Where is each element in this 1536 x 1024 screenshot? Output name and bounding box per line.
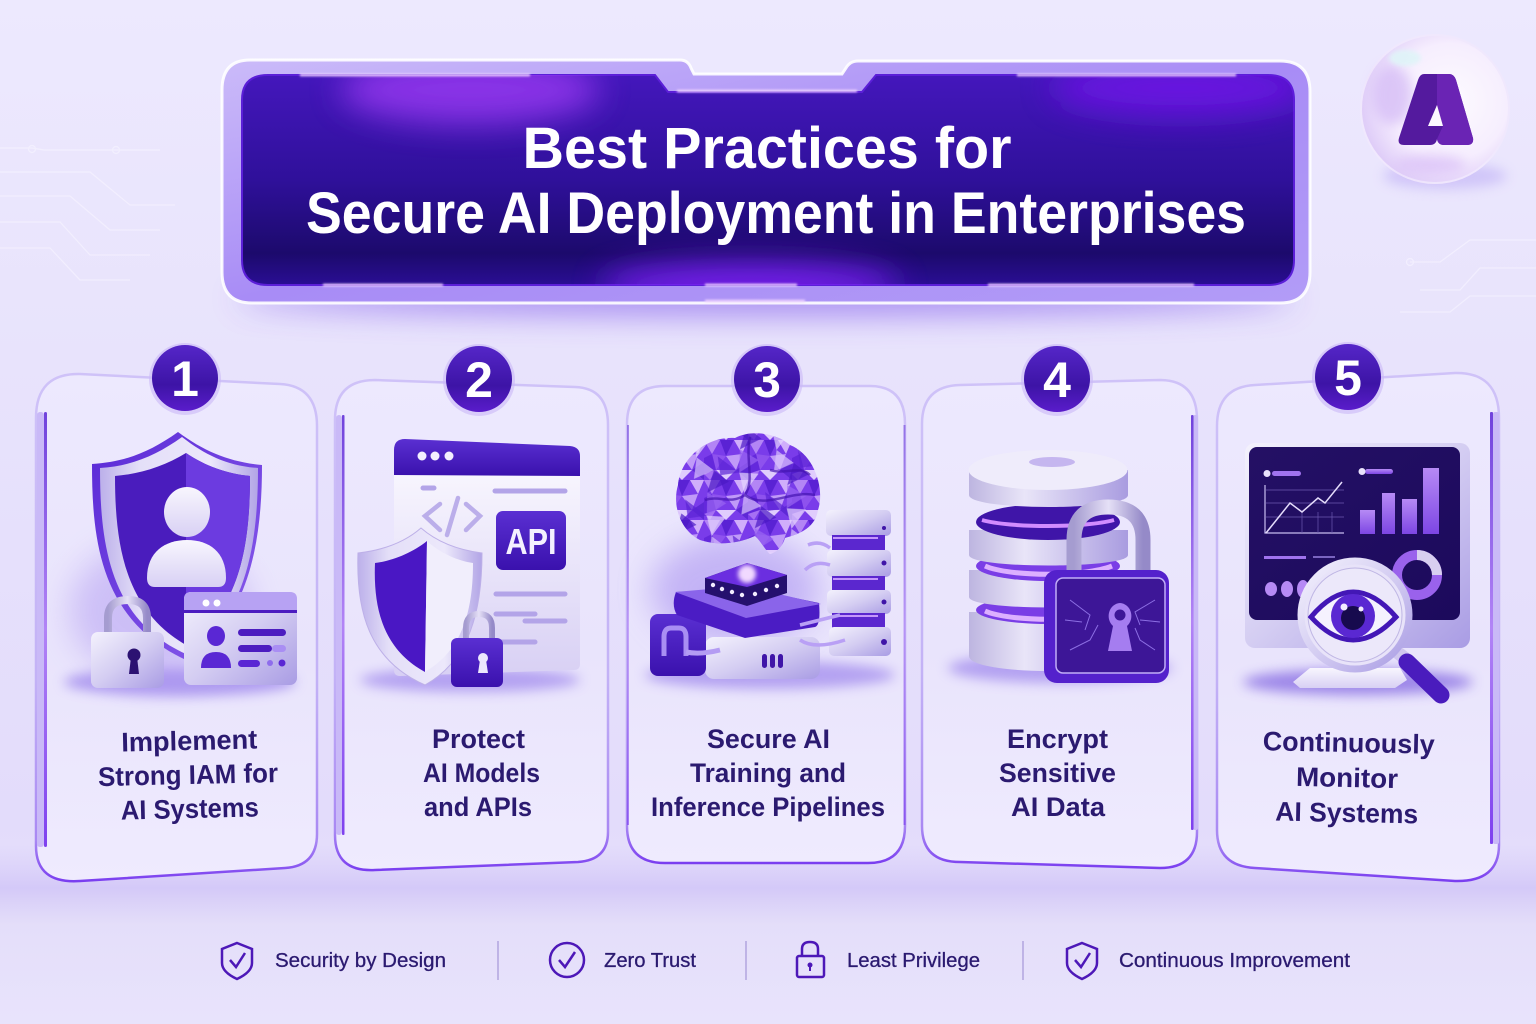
card 1 label <box>97 724 280 826</box>
security by design: Security by Design <box>275 950 446 972</box>
logo bubble <box>1361 35 1509 189</box>
icon: API window with shield and lock <box>358 439 580 692</box>
card 4 label: AI Data <box>1011 792 1106 822</box>
card 1 label: Implement <box>121 724 258 758</box>
zero trust <box>550 943 696 977</box>
number badge 4: 4 <box>1043 352 1071 408</box>
keyhole <box>1108 603 1132 651</box>
panel: card 3 <box>627 344 906 863</box>
light beam <box>745 555 749 580</box>
title banner <box>222 56 1310 314</box>
lower white box <box>705 637 820 679</box>
stat pills <box>1264 556 1335 598</box>
code symbol <box>425 498 480 535</box>
user figure <box>147 487 226 587</box>
card 3 label: Secure AI <box>707 724 830 754</box>
card 4 label: Encrypt <box>1007 724 1108 754</box>
number badge 2 <box>443 344 515 416</box>
panel: card 5 <box>1217 342 1499 881</box>
donut chart <box>1397 555 1437 595</box>
circuit pattern right <box>1400 240 1536 312</box>
number badge 1: 1 <box>171 351 199 407</box>
card 2 label: and APIs <box>424 792 532 822</box>
zero trust: Zero Trust <box>604 950 696 972</box>
number badge 4 <box>1021 344 1093 416</box>
base plate <box>674 586 821 638</box>
card 2 label <box>423 724 540 822</box>
card 1 label: AI Systems <box>120 792 259 826</box>
ID card <box>184 592 297 685</box>
title text <box>306 116 1246 246</box>
security by design <box>222 943 446 979</box>
card 1 label: Strong IAM for <box>98 758 279 792</box>
icon: shield with user, lock and ID card <box>64 432 297 696</box>
panel: card 2 <box>335 344 608 870</box>
least privilege <box>797 942 980 977</box>
card 5 label: Monitor <box>1296 762 1399 794</box>
continuous improvement <box>1067 943 1350 979</box>
API button <box>496 511 566 570</box>
footer principles <box>222 941 1350 980</box>
card 5 label <box>1261 726 1435 830</box>
number badge 2: 2 <box>465 352 493 408</box>
card 3 label <box>651 724 885 822</box>
number badge 1 <box>149 343 221 415</box>
server stack <box>826 510 891 656</box>
card 4 label <box>999 724 1116 822</box>
number badge 5 <box>1312 342 1384 414</box>
bar chart <box>1358 468 1439 534</box>
chip <box>705 563 787 606</box>
card 5 label: Continuously <box>1262 726 1435 760</box>
continuous improvement: Continuous Improvement <box>1119 950 1350 972</box>
floor <box>0 845 1536 1024</box>
panel: card 4 <box>922 344 1198 868</box>
line chart <box>1264 470 1344 533</box>
padlock <box>451 614 503 687</box>
number badge 3 <box>731 344 803 416</box>
title text: Best Practices for <box>522 116 1012 181</box>
icon: encrypted database with padlock <box>948 450 1172 683</box>
padlock <box>91 600 164 688</box>
database <box>968 450 1128 671</box>
padlock <box>1044 507 1169 683</box>
number badge 5: 5 <box>1334 350 1362 406</box>
API button: API <box>506 521 556 562</box>
card 3 label: Inference Pipelines <box>651 792 885 822</box>
magnifier with eye <box>1301 561 1441 695</box>
cables <box>800 543 845 645</box>
card 4 label: Sensitive <box>999 758 1116 788</box>
panel: card 1 <box>36 343 317 881</box>
shield <box>358 528 482 685</box>
circuit pattern left <box>0 146 175 280</box>
card 5 label: AI Systems <box>1275 796 1419 829</box>
brain <box>676 433 820 554</box>
icon: monitor dashboard with magnifier eye <box>1243 443 1473 695</box>
card 2 label: AI Models <box>423 758 540 788</box>
icon: brain over AI chip with server stack <box>645 428 895 689</box>
least privilege: Least Privilege <box>847 950 980 972</box>
number badge 3: 3 <box>753 352 781 408</box>
card 2 label: Protect <box>432 724 525 754</box>
purple lock block <box>650 614 720 676</box>
card 3 label: Training and <box>690 758 846 788</box>
title text: Secure AI Deployment in Enterprises <box>306 181 1246 246</box>
